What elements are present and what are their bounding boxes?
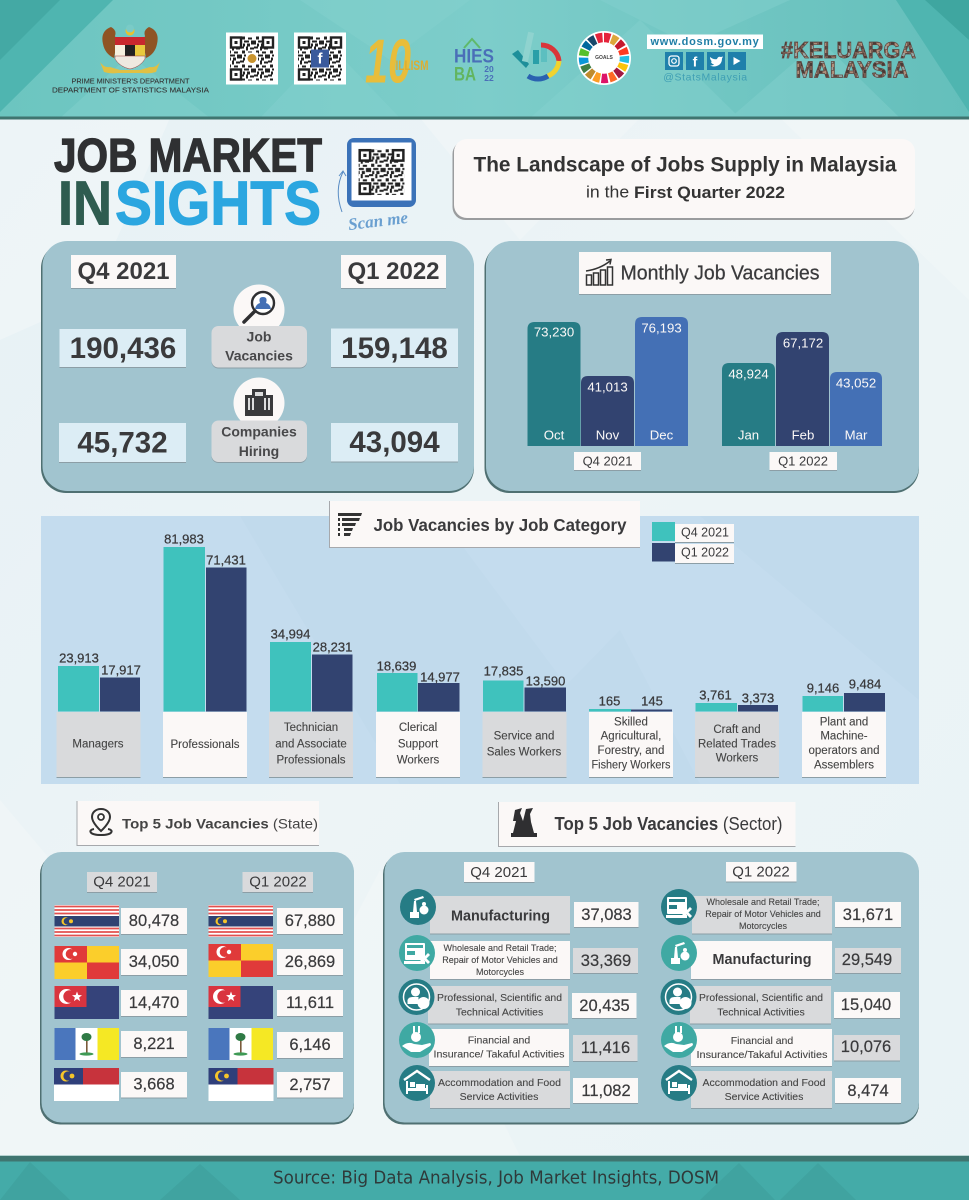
heading: job vacancies by category [329,501,640,548]
Q4 row: manufacturing: Manufacturing [451,908,550,924]
website and social links: @StatsMalaysia [663,72,748,84]
period label: Q4 2021 [464,862,534,882]
row 4: Penang Q4 [54,1028,187,1060]
heading: monthly job vacancies [579,252,831,294]
logo: HIES BA 2022: BA [454,64,476,86]
title logo: Job Market Insights: SIGHTS [115,170,321,238]
category: skilled agricultural: 145 [641,694,663,708]
logo: SDG wheel [575,29,633,87]
row 5: Melaka Q4 [54,1068,187,1101]
value: companies hiring Q1 2022 [331,423,458,462]
heading: monthly job vacancies: Monthly Job Vacancies [620,262,820,284]
axis label: Q1 2022 [770,452,837,470]
category: skilled agricultural: Forestry, and [598,745,664,757]
logo: statistics day [512,32,559,79]
Q1 row: accommodation: Service Activities [725,1091,803,1103]
category: craft: 3,761 [699,688,732,702]
Q4 row: financial: Insurance/ Takaful Activities [434,1048,564,1060]
heading: top 5 by state [76,801,319,846]
category: clerical: Workers [397,754,440,766]
value: companies hiring Q1 2022: 43,094 [349,426,440,459]
axis label: Q1 2022: Q1 2022 [778,454,828,468]
category: skilled agricultural: 165 [599,694,620,708]
bar: Feb [776,332,829,446]
heading: job vacancies by category: Job Vacancies by Job Category [374,515,627,535]
label: companies hiring: Hiring [239,443,279,459]
period label: Q4 2021: Q4 2021 [470,864,528,881]
heading: top 5 by state: Top 5 Job Vacancies (State) [122,816,318,832]
value: companies hiring Q4 2021: 45,732 [77,426,168,460]
Q4 row: professional: Technical Activities [456,1006,543,1018]
Q4 row: professional: 20,435 [579,997,630,1015]
row 4: Penang Q1: 6,146 [289,1036,331,1054]
bar: Nov: Nov [596,428,620,442]
bar: Jan: 48,924 [728,366,769,382]
category: managers: 17,917 [101,662,141,678]
Q1 row: financial [661,1022,900,1066]
bar: Mar: 43,052 [836,376,876,390]
row 5: Melaka Q1 [208,1068,343,1101]
period label: Q4 2021 [87,872,157,892]
Q4 row: manufacturing [400,889,638,934]
panel: job vacancies by category [41,501,919,784]
row 5: Melaka Q4: 3,668 [133,1076,175,1094]
category: professionals: 81,983 [164,532,204,546]
legend: Q4 2021 [681,526,729,540]
panel: top 5 states [40,852,354,1124]
footer band [0,1155,969,1200]
bar: Dec [635,317,688,446]
Q1 row: manufacturing: 29,549 [842,951,892,969]
icon: office building [234,378,284,428]
logo: 10 years ILLISM: 10 [365,28,411,96]
hashtag Keluarga Malaysia [781,37,916,82]
heading: top 5 by sector [498,802,796,847]
bar: Mar [830,372,882,446]
label: companies hiring: Companies [221,424,297,440]
Q1 2022 heading: Q1 2022 [347,258,440,285]
category: professionals [163,532,247,777]
website and social links: www.dosm.gov.my [650,36,760,48]
bar: Oct [528,322,580,446]
axis label: Q4 2021: Q4 2021 [583,454,632,468]
logo: HIES BA 2022 [454,39,494,86]
category: service and sales: Service and [494,730,554,742]
website and social links [647,34,763,84]
category: skilled agricultural: Skilled [614,716,648,728]
category: clerical: Support [398,738,439,750]
website and social links: f [693,54,698,70]
category: plant and machine: operators and [809,745,879,757]
category: service and sales: Sales Workers [487,746,562,758]
category: service and sales: 13,590 [526,674,565,688]
value: job vacancies Q4 2021: 190,436 [70,332,176,365]
category: technicians: 28,231 [313,640,352,654]
Q4 2021 heading: Q4 2021 [77,258,170,285]
bar: Jan [722,363,775,446]
period label: Q1 2022: Q1 2022 [732,864,790,880]
department name: DEPARTMENT OF STATISTICS MALAYSIA [52,86,209,94]
category: craft: Related Trades [698,738,776,750]
category: technicians: 34,994 [271,626,310,642]
legend: Q1 2022 [681,546,729,560]
label: job vacancies [212,326,307,368]
panel: monthly job vacancies [484,241,919,493]
bar: Oct: 73,230 [534,324,574,340]
category: plant and machine: Machine- [820,730,868,742]
category: clerical: 18,639 [377,658,416,674]
Q4 row: professional: Professional, Scientific and [437,992,562,1004]
category: skilled agricultural: Fishery Workers [592,760,671,772]
Q4 row: wholesale and retail: Motorcycles [476,967,525,977]
QR code: scan me: Scan me [347,208,409,234]
headline card: The Landscape of Jobs Supply in Malaysia [474,154,897,176]
category: technicians: and Associate [275,738,347,750]
row 2: Selangor Q1: 26,869 [285,953,335,971]
department name: PRIME MINISTER'S DEPARTMENT [72,76,190,86]
category: craft: Craft and [713,724,761,736]
Q4 row: professional [398,979,636,1024]
logo: Malaysia coat of arms [100,24,160,73]
category: service and sales: 17,835 [484,664,523,678]
category: craft: Workers [716,752,759,764]
Q4 row: financial: 11,416 [581,1039,630,1057]
row 1: Kuala Lumpur Q1 [208,905,343,937]
label: job vacancies: Vacancies [225,348,293,364]
category: technicians: Professionals [276,754,346,766]
bar: Feb: 67,172 [783,336,823,350]
value: companies hiring Q4 2021 [59,423,186,462]
hashtag Keluarga Malaysia: #KELUARGA [781,37,916,63]
title logo: Job Market Insights: IN [58,170,112,238]
category: clerical: 14,977 [420,670,460,684]
row 3: Johor Q1 [208,986,343,1019]
label: companies hiring [212,420,307,462]
Q4 row: wholesale and retail: 33,369 [581,952,631,970]
bar: Dec: Dec [650,428,674,442]
category: managers: Managers [72,738,124,750]
Q1 row: professional: Technical Activities [717,1006,805,1018]
Q1 row: professional [660,979,900,1024]
row 1: Kuala Lumpur Q4 [54,905,187,937]
Q1 row: financial: Financial and [731,1035,793,1047]
legend [652,522,734,563]
bar: Feb: Feb [792,428,814,442]
Q4 row: accommodation: 11,082 [581,1082,631,1100]
Q4 row: accommodation: Service Activities [460,1091,538,1103]
panel: totals [41,241,474,493]
category: technicians [269,626,353,777]
category: craft: 3,373 [742,690,774,706]
row 2: Selangor Q4 [54,946,187,979]
category: plant and machine: Plant and [820,716,868,728]
title logo: Job Market Insights [54,128,322,238]
Q1 row: wholesale and retail: 31,671 [843,906,893,924]
Q4 row: wholesale and retail [399,935,638,979]
bar: Nov: 41,013 [587,380,628,394]
row 2: Selangor Q4: 34,050 [129,953,179,971]
Q1 row: professional: 15,040 [841,996,891,1014]
Q1 row: manufacturing: Manufacturing [712,951,812,968]
period label: Q1 2022: Q1 2022 [249,874,307,890]
period label: Q4 2021: Q4 2021 [93,874,151,890]
Q1 row: wholesale and retail: Wholesale and Retail Trade; [706,897,820,907]
label: job vacancies: Job [247,328,271,344]
bar: Dec: 76,193 [641,320,682,336]
source note: Source: Big Data Analysis, Job Market Insights, DOSM [273,1168,719,1188]
Q4 row: financial: Financial and [468,1034,530,1046]
value: job vacancies Q1 2022: 159,148 [341,332,448,365]
logo: HIES BA 2022: 22 [484,73,494,83]
Q1 row: wholesale and retail [661,889,901,934]
Q1 row: professional: Professional, Scientific and [699,992,823,1004]
category: craft [695,688,779,777]
bar: Jan: Jan [738,428,759,442]
Q1 row: financial: Insurance/Takaful Activities [696,1049,828,1061]
QR code: scan me [338,138,416,234]
logo: HIES BA 2022: 20 [484,64,494,74]
Q1 row: accommodation [661,1065,901,1108]
category: professionals: 71,431 [206,552,246,568]
category: technicians: Technician [284,722,338,734]
QR code: crest [226,32,278,84]
row 4: Penang Q1 [208,1028,343,1060]
logo: SDG wheel: GOALS [595,55,614,61]
Q1 row: wholesale and retail: Motorcycles [739,921,788,931]
category: skilled agricultural [589,694,673,777]
Q1 row: accommodation: Accommodation and Food [702,1077,826,1089]
heading: top 5 by sector: Top 5 Job Vacancies (Sector) [554,814,782,834]
category: service and sales [482,664,566,777]
axis label: Q4 2021 [574,452,641,470]
QR code: facebook [294,32,346,84]
row 1: Kuala Lumpur Q4: 80,478 [129,912,179,930]
period label: Q1 2022 [242,872,313,892]
Q1 row: financial: 10,076 [841,1038,891,1056]
category: managers: 23,913 [59,650,99,666]
category: plant and machine: Assemblers [814,760,874,772]
category: skilled agricultural: Agricultural, [601,730,661,742]
Q4 row: financial [399,1022,638,1066]
headline card [452,139,915,220]
row 3: Johor Q4 [54,986,187,1019]
Q4 row: manufacturing: 37,083 [581,906,632,924]
row 5: Melaka Q1: 2,757 [289,1076,331,1094]
category: plant and machine [802,676,886,777]
bar chart: monthly vacancies [528,317,882,446]
logo: HIES BA 2022: HIES [454,46,494,68]
Q4 row: wholesale and retail: Wholesale and Retail Trade; [443,943,557,953]
row 3: Johor Q4: 14,470 [129,994,179,1012]
Q1 row: accommodation: 8,474 [847,1082,889,1100]
Q4 row: accommodation [399,1065,638,1108]
header band [0,0,969,120]
category: clerical [376,658,460,777]
row 2: Selangor Q1 [208,944,343,977]
headline card: in the First Quarter 2022 [586,182,785,202]
category: managers [56,650,141,777]
category: plant and machine: 9,146 [807,680,839,696]
icon: magnifier with person [234,284,284,336]
Q4 row: wholesale and retail: Repair of Motor Vehicles and [442,955,558,965]
department name [52,76,209,94]
logo: 10 years ILLISM: ILLISM [396,57,428,73]
bar: Mar: Mar [845,428,868,442]
row 1: Kuala Lumpur Q1: 67,880 [285,912,335,930]
Q1 row: wholesale and retail: Repair of Motor Vehicles and [705,909,821,919]
row 3: Johor Q1: 11,611 [286,994,334,1012]
panel: top 5 sectors [383,852,919,1124]
bar: Nov [581,376,634,446]
category: professionals: Professionals [170,739,240,751]
row 4: Penang Q4: 8,221 [133,1035,175,1053]
QR code: facebook: f [318,50,324,68]
Q1 row: manufacturing [661,935,901,979]
category: plant and machine: 9,484 [849,676,881,692]
hashtag Keluarga Malaysia: MALAYSIA [796,56,908,82]
title logo: Job Market Insights: JOB MARKET [54,128,322,182]
category: clerical: Clerical [399,722,437,734]
bar: Oct: Oct [544,428,565,442]
Q4 row: accommodation: Accommodation and Food [438,1077,561,1089]
